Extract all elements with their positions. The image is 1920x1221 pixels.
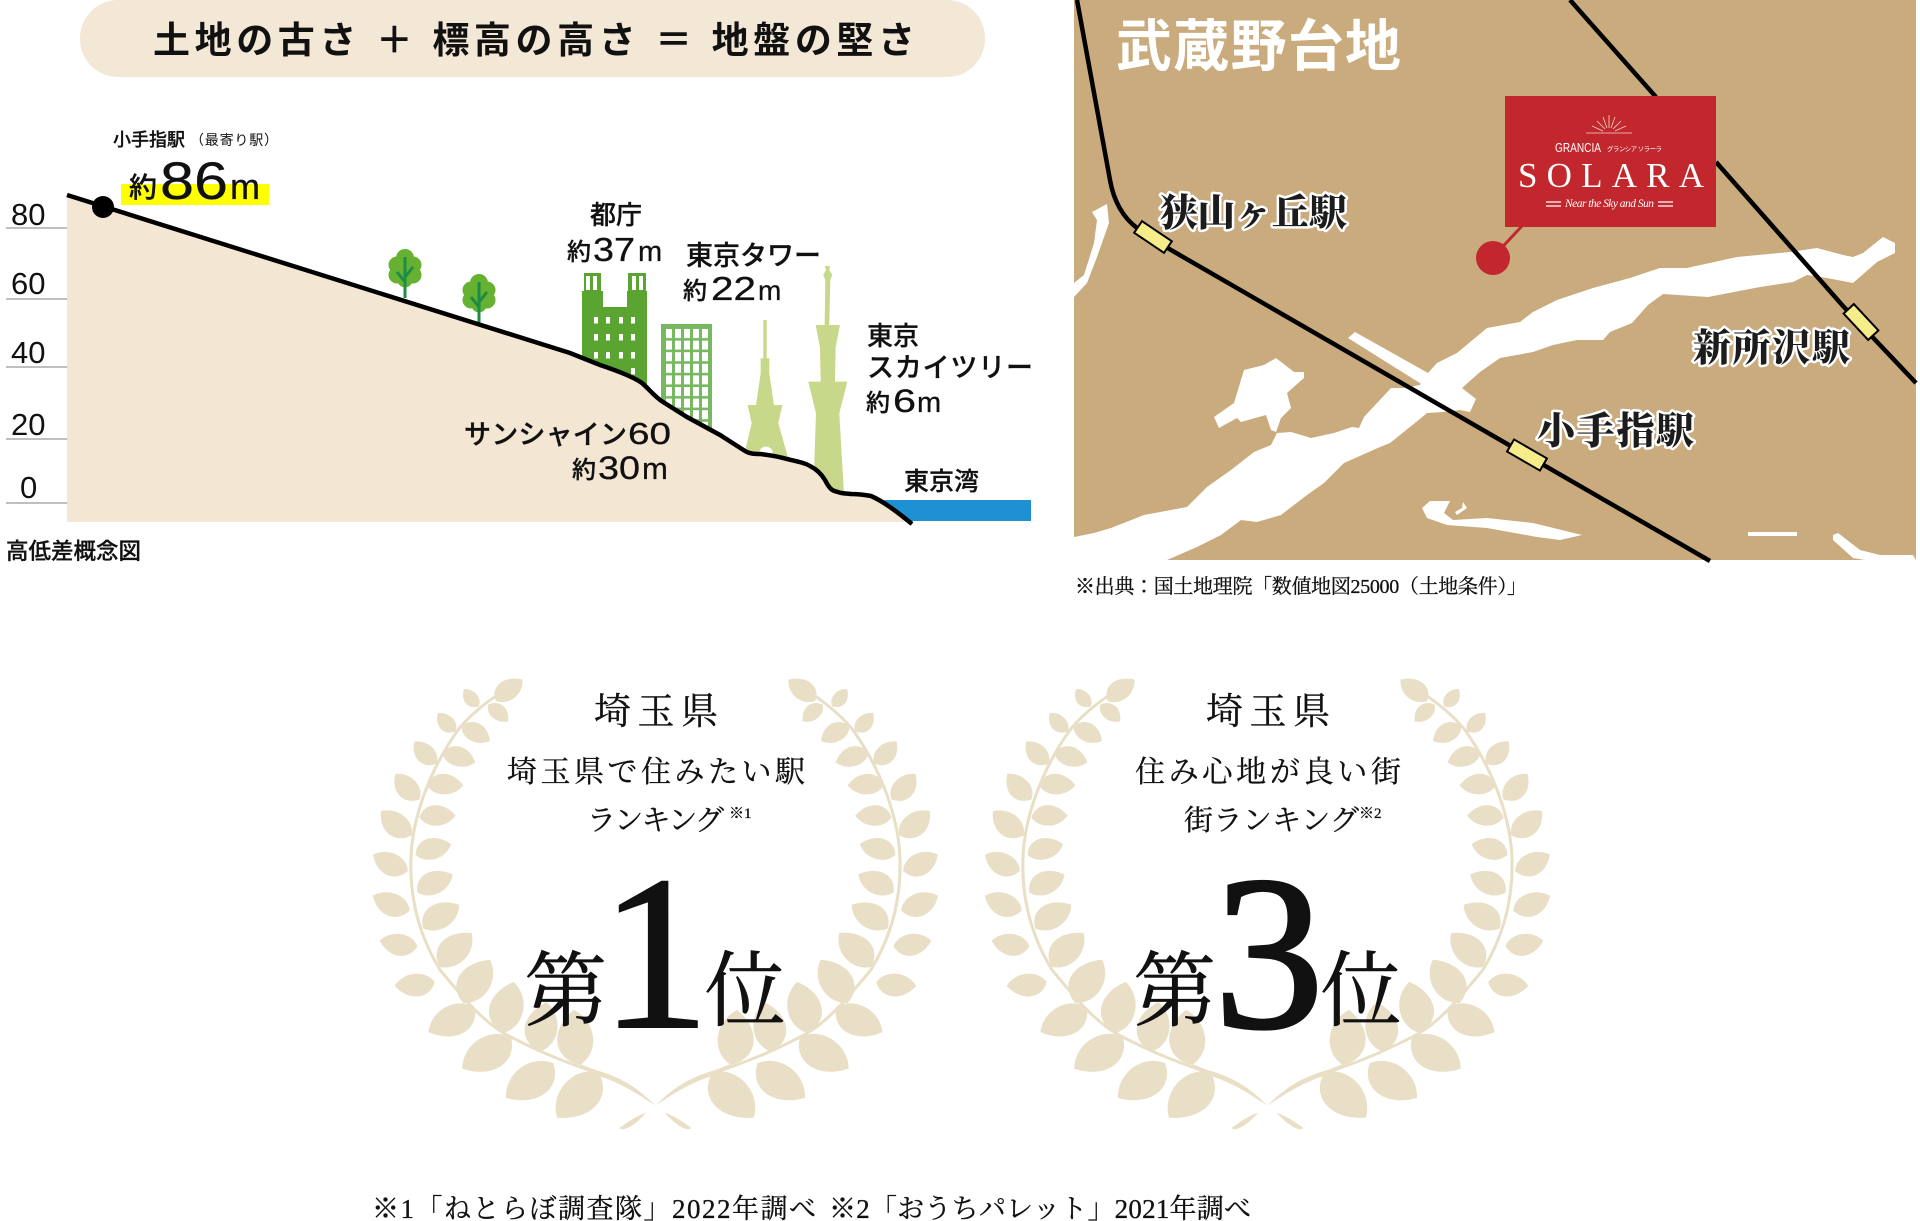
building: Sunshine 60 xyxy=(661,324,712,430)
river xyxy=(1074,237,1895,560)
award: rank 3: 埼玉県 xyxy=(1206,691,1330,733)
station dot xyxy=(92,196,114,218)
label: Tocho: m xyxy=(638,236,662,268)
label: Kotesashi station: 約 xyxy=(129,172,157,203)
logo: Grancia Solara: GRANCIA xyxy=(1555,140,1601,155)
award: rank 1: ランキング xyxy=(587,805,724,837)
label: Tokyo Bay: 東京湾 xyxy=(904,468,979,496)
label: Kotesashi station: 86 xyxy=(160,152,228,211)
award: rank 3 xyxy=(979,671,1556,1131)
Tokyo Bay water xyxy=(880,500,1031,521)
map panel xyxy=(1074,0,1916,598)
icon: Tokyo Tower xyxy=(743,320,788,459)
heading pill xyxy=(80,0,985,77)
river branch xyxy=(1348,332,1428,385)
map title: 武蔵野台地 xyxy=(1116,15,1401,78)
icon: tree 2 xyxy=(462,274,496,323)
map source note: ※出典：国土地理院「数値地図25000（土地条件）」 xyxy=(1075,575,1527,598)
label: Skytree: 東京 xyxy=(867,321,919,351)
label: Sunshine 60: 30 xyxy=(598,450,640,486)
label: Tokyo Tower xyxy=(683,241,821,307)
label: Tocho: 都庁 xyxy=(590,200,642,230)
award: rank 1: 埼玉県 xyxy=(594,691,718,733)
award: rank 1: 埼玉県で住みたい駅 xyxy=(507,756,805,789)
station label: Kotesashi: 小手指駅 xyxy=(1537,411,1694,453)
axis scale: 60 xyxy=(11,266,45,301)
caption: elevation diagram: 高低差概念図 xyxy=(6,539,141,564)
footnote xyxy=(372,1194,1251,1221)
award: rank 3: 第 xyxy=(1134,946,1216,1037)
building: Tocho xyxy=(582,273,647,400)
railway lines xyxy=(1077,0,1916,561)
award: rank 1: 1 xyxy=(600,831,710,1075)
axis scale: 80 xyxy=(11,197,45,232)
award: rank 3: 3 xyxy=(1214,831,1324,1075)
ground slope xyxy=(67,195,912,522)
label: Tocho: 37 xyxy=(593,231,635,268)
slope line xyxy=(67,195,912,524)
label: Sunshine 60 xyxy=(464,416,671,486)
axis scale xyxy=(6,197,67,505)
award: rank 3: 位 xyxy=(1320,946,1402,1037)
label: Kotesashi station: m xyxy=(230,166,260,207)
heading pill: 土地の古さ ＋ 標高の高さ ＝ 地盤の堅さ xyxy=(153,20,915,61)
award: rank 3: 街ランキング xyxy=(1184,805,1359,837)
label: Kotesashi station xyxy=(113,130,278,211)
label: Tocho: 約 xyxy=(567,239,591,266)
icon: Skytree xyxy=(808,266,847,493)
label: Sunshine 60: 約 xyxy=(572,457,596,484)
axis scale: 20 xyxy=(11,407,45,442)
property marker xyxy=(1476,226,1522,275)
station label: Shin-Tokorozawa: 新所沢駅 xyxy=(1693,328,1850,370)
logo: Grancia Solara: グランシア ソラーラ xyxy=(1607,144,1662,153)
label: Tokyo Tower: 約 xyxy=(683,278,707,305)
label: Tokyo Tower: 東京タワー xyxy=(686,241,821,271)
wreath xyxy=(979,671,1556,1131)
station label: Sayamagaoka: 狭山ヶ丘駅 xyxy=(1160,193,1347,235)
award: rank 1: 位 xyxy=(704,946,786,1037)
logo: Grancia Solara: SOLARA xyxy=(1518,156,1705,195)
label: Skytree: 6 xyxy=(893,383,916,419)
logo: Grancia Solara xyxy=(1505,96,1716,227)
axis scale: 40 xyxy=(11,335,45,370)
label: Sunshine 60: 60 xyxy=(628,416,671,451)
label: Tokyo Tower: 22 xyxy=(711,270,756,307)
terrain patches xyxy=(1074,204,1916,560)
award: rank 1: ※1 xyxy=(729,806,752,822)
label: Sunshine 60: m xyxy=(642,451,668,486)
chart: elevation cross-section xyxy=(6,130,1033,564)
label: Kotesashi station: （最寄り駅） xyxy=(190,132,278,148)
icon: tree 1 xyxy=(388,249,422,298)
award: rank 1 xyxy=(367,671,944,1131)
award: rank 1: 第 xyxy=(525,946,607,1037)
label: Skytree: スカイツリー xyxy=(867,353,1033,383)
label: Kotesashi station: 小手指駅 xyxy=(113,130,185,150)
award: rank 3: 住み心地が良い街 xyxy=(1135,756,1401,789)
label: Skytree xyxy=(866,321,1033,419)
axis scale: 0 xyxy=(20,470,37,505)
award: rank 3: ※2 xyxy=(1359,806,1382,822)
station markers xyxy=(1134,221,1878,471)
label: Skytree: m xyxy=(917,387,941,419)
logo: Grancia Solara: Near the Sky and Sun xyxy=(1564,198,1654,210)
label: Skytree: 約 xyxy=(866,390,890,417)
label: Tocho xyxy=(567,200,662,268)
label: Tokyo Tower: m xyxy=(758,275,781,306)
wreath xyxy=(367,671,944,1131)
label: Sunshine 60: サンシャイン xyxy=(464,420,627,450)
